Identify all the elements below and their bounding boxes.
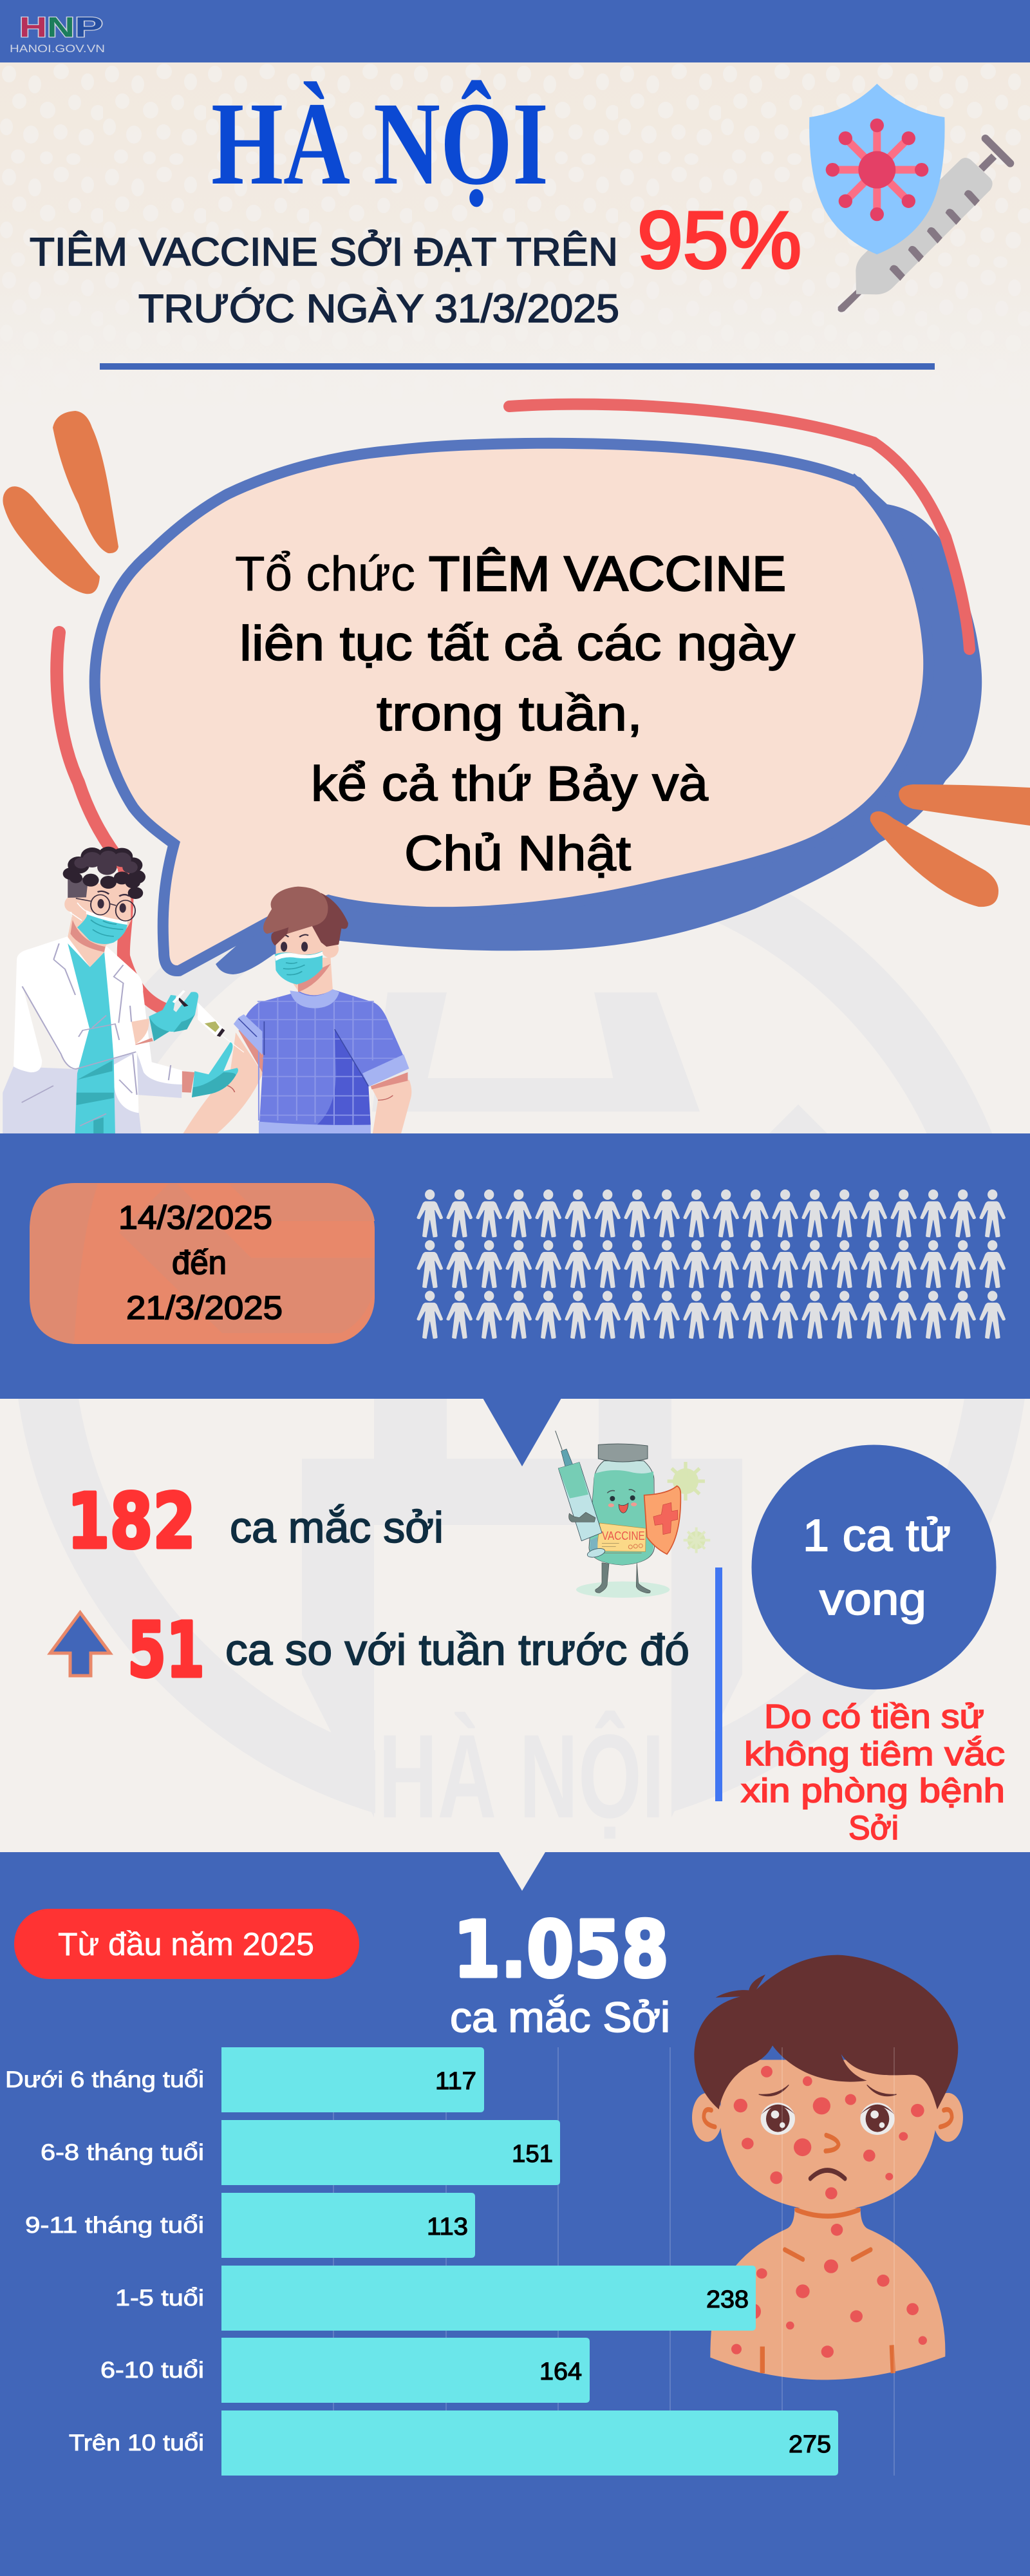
callout: 1 death: 1 ca tử bbox=[803, 1510, 951, 1560]
text: cause of death: xin phòng bệnh bbox=[741, 1772, 1005, 1810]
logo caption: HANOI.GOV.VN bbox=[10, 43, 105, 55]
bar: 9-11 months: 113 bbox=[427, 2213, 468, 2240]
bar: over 10 years: 275 bbox=[789, 2431, 831, 2458]
bar: 6-8 months bbox=[41, 2120, 560, 2185]
stat: total 1.058 bbox=[450, 1906, 670, 2041]
bar: 6-10 years: 164 bbox=[539, 2358, 582, 2385]
bar: 1-5 years: 238 bbox=[706, 2286, 749, 2313]
title: HÀ NỘI bbox=[211, 78, 548, 210]
bubble text: Chủ Nhật bbox=[404, 826, 631, 881]
bubble peach body with blue outline bbox=[100, 449, 923, 965]
stat: total 1.058: ca mắc Sởi bbox=[450, 1993, 670, 2041]
illustration: vaccine bottle mascot: VACCINE bbox=[602, 1529, 645, 1542]
stat: total 1.058: 1.058 bbox=[453, 1906, 669, 1995]
doctor bbox=[3, 847, 244, 1134]
patient bbox=[183, 887, 411, 1134]
illustration: sick boy bbox=[692, 1955, 963, 2380]
text: cause of death: không tiêm vắc bbox=[744, 1736, 1005, 1773]
bar: 1-5 years: 1-5 tuổi bbox=[115, 2286, 204, 2311]
headline number 95%: 95% bbox=[637, 196, 801, 285]
bar: 6-8 months: 6-8 tháng tuổi bbox=[41, 2140, 204, 2165]
bar chart: cases by age bbox=[5, 2047, 894, 2476]
icon: up arrow bbox=[50, 1613, 110, 1676]
text: cause of death: Do có tiền sử bbox=[764, 1698, 984, 1736]
watermark: Hanoi emblem: HÀ NỘI bbox=[379, 1710, 664, 1843]
text: cause of death bbox=[741, 1698, 1005, 1847]
subtitle bbox=[30, 230, 619, 330]
bar: 6-10 years bbox=[100, 2338, 590, 2403]
bar: over 10 years bbox=[69, 2410, 838, 2476]
bar: 6-8 months: 151 bbox=[512, 2141, 553, 2168]
logo: HNP: P bbox=[75, 12, 103, 43]
badge: year label: Từ đầu năm 2025 bbox=[58, 1926, 314, 1962]
bar: under 6 months bbox=[5, 2047, 484, 2112]
bar: 9-11 months: 9-11 tháng tuổi bbox=[25, 2213, 204, 2238]
illustration: doctor and patient bbox=[3, 847, 411, 1134]
date badge: 14/3/2025 bbox=[118, 1199, 272, 1236]
orange accent shapes bbox=[3, 411, 1030, 907]
bar: 6-10 years: 6-10 tuổi bbox=[100, 2358, 204, 2383]
stat: 182 cases bbox=[67, 1477, 444, 1566]
decorative red curve, left of bubble bbox=[57, 632, 166, 1010]
callout: 1 death bbox=[752, 1445, 997, 1690]
logo: HNP bbox=[19, 12, 103, 43]
section band: year to date bbox=[0, 1852, 1030, 2576]
divider: vertical blue rule bbox=[715, 1567, 722, 1801]
bubble text: liên tục tất cả các ngày bbox=[239, 616, 795, 671]
badge: year label bbox=[14, 1909, 359, 1979]
subtitle: TRƯỚC NGÀY 31/3/2025 bbox=[138, 287, 619, 330]
pictogram: people grid bbox=[417, 1189, 1006, 1339]
icon: shield and syringe bbox=[809, 84, 1016, 312]
bubble text: trong tuần, bbox=[377, 687, 642, 741]
bubble blue shadow bbox=[216, 473, 982, 974]
panel: speech bubble bbox=[100, 449, 982, 974]
date badge bbox=[30, 1183, 375, 1344]
stat: 182 cases: ca mắc sởi bbox=[230, 1503, 444, 1552]
divider under title bbox=[100, 363, 935, 370]
callout: 1 death: vong bbox=[819, 1574, 926, 1624]
illustration: vaccine bottle mascot bbox=[556, 1431, 710, 1598]
watermark: Hanoi emblem bbox=[42, 848, 1000, 1855]
logo: HNP: N bbox=[47, 12, 75, 43]
arrow: pointer into year section bbox=[499, 1852, 545, 1891]
stat: 182 cases: 182 bbox=[67, 1477, 196, 1566]
bubble text bbox=[235, 547, 795, 881]
bubble text: Tổ chức bbox=[235, 547, 415, 601]
bubble text: kể cả thứ Bảy và bbox=[311, 757, 709, 811]
stat: increase of 51 bbox=[50, 1605, 689, 1694]
section band: date range bbox=[0, 1133, 1030, 1399]
header band bbox=[0, 0, 1030, 62]
subtitle: TIÊM VACCINE SỞI ĐẠT TRÊN bbox=[30, 230, 618, 274]
bar: over 10 years: Trên 10 tuổi bbox=[69, 2430, 204, 2456]
date badge: 21/3/2025 bbox=[126, 1289, 283, 1326]
date badge: đến bbox=[172, 1244, 227, 1281]
stat: increase of 51: ca so với tuần trước đó bbox=[225, 1625, 689, 1674]
logo: HNP: H bbox=[19, 12, 47, 43]
bar: 1-5 years bbox=[115, 2266, 756, 2331]
bubble text: TIÊM VACCINE bbox=[429, 547, 786, 601]
arrow: pointer from date band bbox=[483, 1398, 561, 1466]
bar: 9-11 months bbox=[25, 2193, 475, 2258]
stat: increase of 51: 51 bbox=[127, 1605, 205, 1694]
text: cause of death: Sởi bbox=[848, 1810, 899, 1847]
decorative red curve, over bubble top right bbox=[509, 404, 969, 649]
bar: under 6 months: 117 bbox=[435, 2068, 476, 2095]
bar: under 6 months: Dưới 6 tháng tuổi bbox=[5, 2067, 204, 2092]
